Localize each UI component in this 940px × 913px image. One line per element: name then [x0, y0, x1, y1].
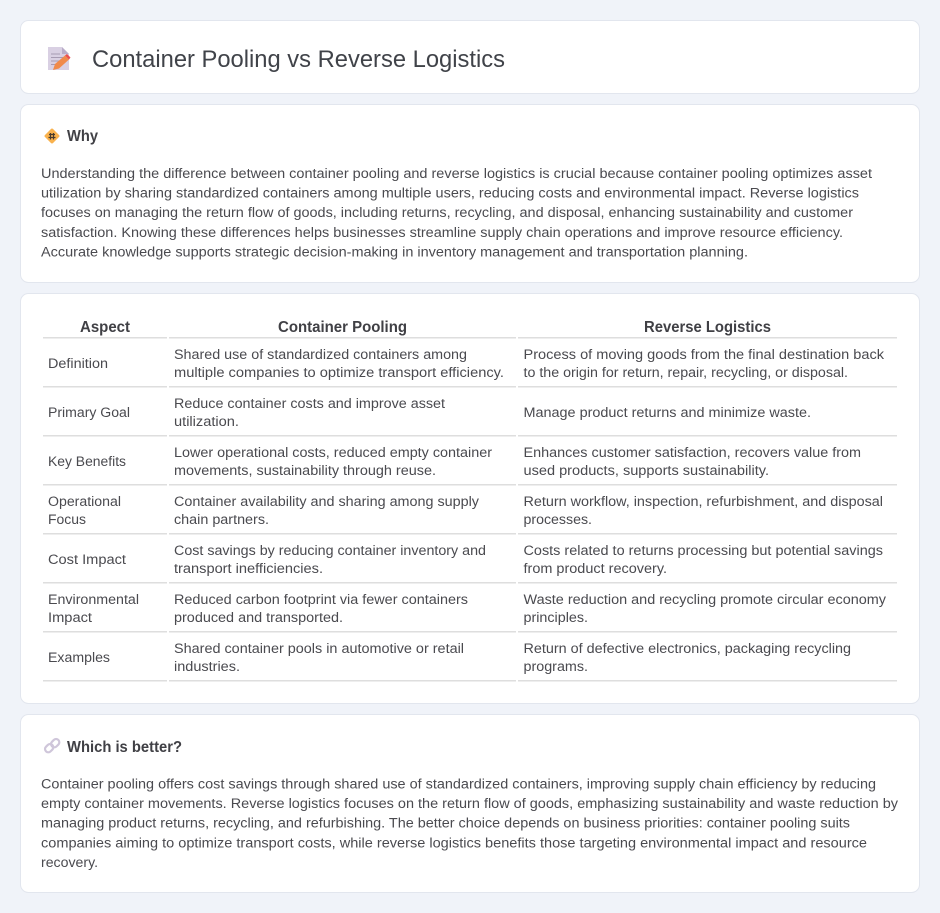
row: primary goal: Primary Goal — [48, 405, 130, 421]
title text: Container Pooling vs Reverse Logistics — [92, 46, 505, 73]
row: primary goal: Manage product returns and minimize waste. — [524, 405, 811, 421]
row: cost impact — [48, 543, 883, 577]
row: environmental impact: Reduced carbon footprint via fewer containers — [174, 592, 468, 608]
table header: Container Pooling — [278, 319, 407, 336]
text block: why: Accurate knowledge supports strategic decision-making in inventory management and transportation planning. — [41, 244, 748, 260]
row: cost impact: transport inefficiencies. — [174, 561, 323, 577]
panel: why — [20, 104, 920, 282]
row: key benefits: Lower operational costs, reduced empty container — [174, 445, 492, 461]
text block: why: satisfaction. Knowing these differences helps businesses streamline supply chain operations and improve resource efficiency. — [41, 225, 843, 241]
icon: document with pencil — [48, 47, 70, 70]
row: environmental impact: Waste reduction and recycling promote circular economy — [524, 592, 887, 608]
table header — [80, 319, 771, 336]
text block: why: focuses on managing the return flow of goods, including returns, recycling, and disposal, enhancing sustainability and customer — [41, 205, 853, 221]
text block: why: Understanding the difference between container pooling and reverse logistics is crucial because container pooling optimizes asset — [41, 166, 872, 182]
table header: Reverse Logistics — [644, 319, 771, 336]
row: key benefits: movements, sustainability through reuse. — [174, 463, 436, 479]
row: definition: Definition — [48, 356, 108, 372]
row: primary goal: Reduce container costs and improve asset — [174, 396, 445, 412]
row: cost impact: Cost Impact — [48, 552, 126, 568]
text block: why: utilization by sharing standardized containers among multiple users, reducing costs and environmental impact. Reverse logistics — [41, 186, 859, 202]
row: examples: Shared container pools in automotive or retail — [174, 641, 464, 657]
row: cost impact: Costs related to returns processing but potential savings — [524, 543, 883, 559]
row: environmental impact: principles. — [524, 610, 588, 626]
row: operational focus: chain partners. — [174, 512, 269, 528]
row: definition: to the origin for return, repair, recycling, or disposal. — [524, 365, 848, 381]
row: examples: industries. — [174, 659, 240, 675]
row: examples: programs. — [524, 659, 588, 675]
row: operational focus: Operational — [48, 494, 121, 510]
icon: orange diamond — [44, 128, 60, 144]
row: operational focus — [48, 494, 883, 528]
row: definition: Shared use of standardized containers among — [174, 347, 467, 363]
row: primary goal — [48, 396, 811, 430]
heading: why: Why — [67, 128, 98, 145]
row: key benefits: used products, supports sustainability. — [524, 463, 769, 479]
row: environmental impact: Impact — [48, 610, 92, 626]
row: environmental impact — [48, 592, 887, 626]
row: operational focus: Focus — [48, 512, 86, 528]
panel: which is better — [20, 714, 920, 892]
text block: which is better: Container pooling offers cost savings through shared use of standardized containers, improving supply chain efficiency by reducing — [41, 776, 876, 792]
heading: which is better: Which is better? — [67, 739, 182, 756]
panel: title — [20, 20, 920, 94]
text block: which is better: recovery. — [41, 855, 98, 871]
text block: which is better: empty container movements. Reverse logistics focuses on the return flow of goods, emphasizing sustainability and waste reduction by — [41, 796, 899, 812]
row: key benefits: Enhances customer satisfaction, recovers value from — [524, 445, 861, 461]
row: operational focus: Return workflow, inspection, refurbishment, and disposal — [524, 494, 883, 510]
row: primary goal: utilization. — [174, 414, 239, 430]
panel: comparison table — [20, 294, 920, 704]
row: environmental impact: produced and transported. — [174, 610, 343, 626]
text block: which is better — [41, 776, 899, 871]
text block: which is better: companies aiming to optimize transport costs, while reverse logistics benefits those targeting environmental impact and resource — [41, 835, 867, 851]
row: examples: Examples — [48, 650, 110, 666]
icon: link — [44, 738, 61, 754]
row: operational focus: Container availability and sharing among supply — [174, 494, 480, 510]
text block: why — [41, 166, 872, 260]
row: definition: Process of moving goods from the final destination back — [524, 347, 885, 363]
row: operational focus: processes. — [524, 512, 592, 528]
row: environmental impact: Environmental — [48, 592, 139, 608]
row: definition — [48, 347, 885, 381]
text block: which is better: managing product returns, recycling, and refurbishing. The better choice depends on business priorities: container pooling suits — [41, 816, 850, 832]
row: examples: Return of defective electronics, packaging recycling — [524, 641, 851, 657]
row: examples — [48, 641, 851, 675]
row: cost impact: Cost savings by reducing container inventory and — [174, 543, 486, 559]
row: key benefits — [48, 445, 861, 479]
row: cost impact: from product recovery. — [524, 561, 667, 577]
row: definition: multiple companies to optimize transport efficiency. — [174, 365, 504, 381]
table header: Aspect — [80, 319, 131, 336]
row: key benefits: Key Benefits — [48, 454, 126, 470]
